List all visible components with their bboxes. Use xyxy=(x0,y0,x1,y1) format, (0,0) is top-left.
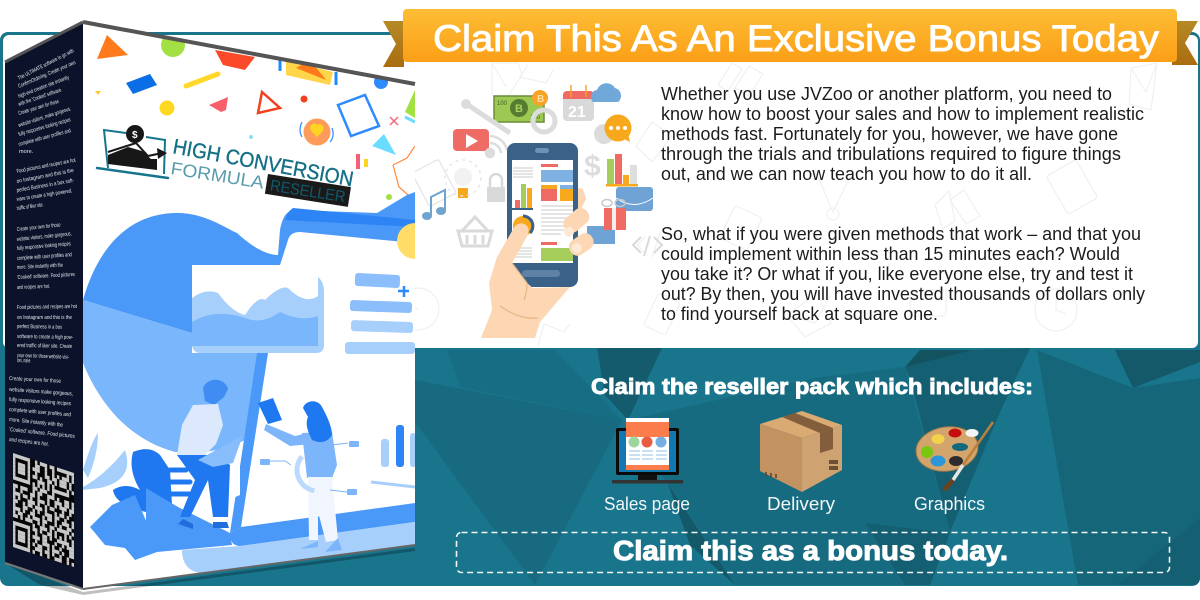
icon: bar chart xyxy=(606,154,638,186)
icon: wrench and gear xyxy=(461,99,555,133)
icon: cash note: 100 xyxy=(497,101,508,107)
icon: sales page on monitor xyxy=(612,418,683,484)
spine text: Create your own for those xyxy=(9,376,61,385)
spine text: 'Cooked' software. Food pictures xyxy=(17,272,75,281)
icon: music note xyxy=(422,190,446,220)
icon: calendar xyxy=(563,85,594,121)
spine text: high-end creation site instantly xyxy=(18,75,70,100)
icon: document xyxy=(412,159,456,207)
panel: white content area xyxy=(3,35,1198,348)
paragraph one xyxy=(661,84,1144,184)
spine text: Create your own for those xyxy=(18,99,60,117)
top finger behind phone xyxy=(575,187,586,209)
phone screen content xyxy=(512,164,573,261)
title: Claim This As An Exclusive Bonus Today xyxy=(433,18,1160,59)
spine text: fully responsive looking recipes xyxy=(17,241,71,252)
paragraph one: Whether you use JVZoo or another platform, you need to xyxy=(661,84,1112,104)
icon: light bulb xyxy=(445,160,481,198)
label: graphics: Graphics xyxy=(914,494,985,514)
icon: wifi signal xyxy=(486,136,507,157)
call to action box xyxy=(456,532,1170,572)
paragraph one: methods fast. Fortunately for you, however, we have gone xyxy=(661,124,1118,144)
spine text: perfect Business in a box xyxy=(17,324,62,331)
spine text: website visitors make gorgeous, xyxy=(8,387,73,397)
paragraph one: know how to boost your sales and how to implement realistic xyxy=(661,104,1144,124)
spine text: The ULTIMATE software to go with xyxy=(17,48,75,82)
spine text: software to create a high pow- xyxy=(17,334,73,341)
icon: dollar sign: $ xyxy=(584,150,601,183)
icon: cash note xyxy=(494,90,548,122)
icon: paint palette xyxy=(913,422,993,490)
spine text: complete with user profiles and xyxy=(17,252,72,262)
background ghost icons xyxy=(397,63,1157,346)
icon: cash note: B xyxy=(515,103,523,115)
spine text: perfect Business in a box soft- xyxy=(16,178,75,194)
icon: gift xyxy=(602,200,626,230)
spine text: complete with user profiles and xyxy=(18,128,72,148)
icon: cash note: 100 xyxy=(530,115,541,121)
spine text: and recipes are hot. xyxy=(9,437,50,448)
logo: FORMULA xyxy=(169,158,265,193)
icon: wallet xyxy=(587,226,615,244)
logo: RESELLER xyxy=(269,178,347,206)
subheading: Claim the reseller pack which includes: xyxy=(591,374,1033,399)
spine text: 'Cooked' software. Food pictures xyxy=(9,427,75,440)
spine text: fully responsive looking recipes xyxy=(18,117,72,138)
body copy xyxy=(661,84,1145,324)
box spine xyxy=(5,22,83,589)
spine text: more. Site instantly with the xyxy=(9,417,63,429)
label: sales page: Sales page xyxy=(604,494,690,514)
confetti shapes xyxy=(95,33,415,201)
spine text: Food pictures and recipes are hot xyxy=(17,304,77,311)
paragraph two: out? By then, you will have invested thousands of dollars only xyxy=(661,284,1145,304)
paragraph one: through the trials and tribulations required to figure things xyxy=(661,144,1121,164)
spine text: website visitors, make gorgeous, xyxy=(17,106,72,129)
product box xyxy=(5,22,433,595)
spine text xyxy=(8,48,77,448)
QR code xyxy=(13,453,74,567)
spine text: and recipes are hot. xyxy=(17,284,50,291)
spine text: on Instagram and this is the xyxy=(16,168,74,185)
icon: delivery box xyxy=(760,411,842,492)
paragraph two: you take it? Or what if you, like everyone else, try and test it xyxy=(661,264,1133,284)
spine text: Food pictures and recipes are hot xyxy=(16,158,77,175)
spine text: more. Site instantly with the xyxy=(17,263,63,271)
spine text: fully responsive looking recipes xyxy=(9,397,71,407)
icon: code brackets xyxy=(633,236,662,256)
title banner xyxy=(403,9,1177,62)
icon: calendar: 21 xyxy=(568,104,586,121)
paragraph two: could implement within less than 15 minutes each? Would xyxy=(661,244,1120,264)
spine text: Create your own for those xyxy=(17,222,61,233)
icon: briefcase xyxy=(616,187,653,211)
spine text: complete with user profiles and xyxy=(9,407,71,418)
box illustration: plants and desk xyxy=(83,433,240,560)
spine text: website visitors, make gorgeous, xyxy=(16,231,72,243)
spine text: ware to create a high powered, xyxy=(16,188,73,203)
logo text: HIGH CONVERSION xyxy=(171,135,355,191)
paragraph two xyxy=(661,224,1145,324)
box illustration: woman with document xyxy=(258,398,359,552)
hand palm and fingers xyxy=(481,205,597,338)
spine text: tors, make. xyxy=(17,358,31,364)
spine text: ered traffic of liker site. Create xyxy=(17,343,72,350)
box illustration: blue backdrop and screen xyxy=(83,192,433,573)
box front xyxy=(83,22,433,589)
logo icon: laptop with rising chart: $ xyxy=(132,130,138,141)
call to action text: Claim this as a bonus today. xyxy=(613,535,1008,566)
icon: speech bubbles xyxy=(594,114,632,144)
icon: shopping basket xyxy=(458,217,492,246)
box illustration: man with laptop xyxy=(177,380,243,529)
spine text: ConfirmOrdering. Create your own xyxy=(17,60,77,90)
icon: cash note: B xyxy=(537,94,544,105)
illustration: phone in hand with icons xyxy=(412,83,662,338)
box shadow xyxy=(5,548,415,595)
spine text: traffic of liker site. xyxy=(16,202,44,212)
spine text: your own for those website visi- xyxy=(17,353,69,361)
logo xyxy=(97,125,355,207)
phone body xyxy=(507,143,578,287)
banner ribbon tails xyxy=(383,21,1198,67)
spine text: with the 'Cooked' software. xyxy=(17,87,63,108)
spine text: more. xyxy=(19,149,34,155)
spine text: on Instagram and this is the xyxy=(17,315,72,321)
paragraph two: to find yourself back at square one. xyxy=(661,304,938,324)
icon: video play xyxy=(453,129,489,151)
paragraph two: So, what if you were given methods that work – and that you xyxy=(661,224,1141,244)
paragraph one: out, and we can now teach you how to do it all. xyxy=(661,164,1032,184)
label: delivery: Delivery xyxy=(767,494,835,514)
icon: cloud xyxy=(591,83,621,102)
logo icon: laptop with rising chart xyxy=(97,125,168,178)
icon: padlock xyxy=(487,174,505,202)
